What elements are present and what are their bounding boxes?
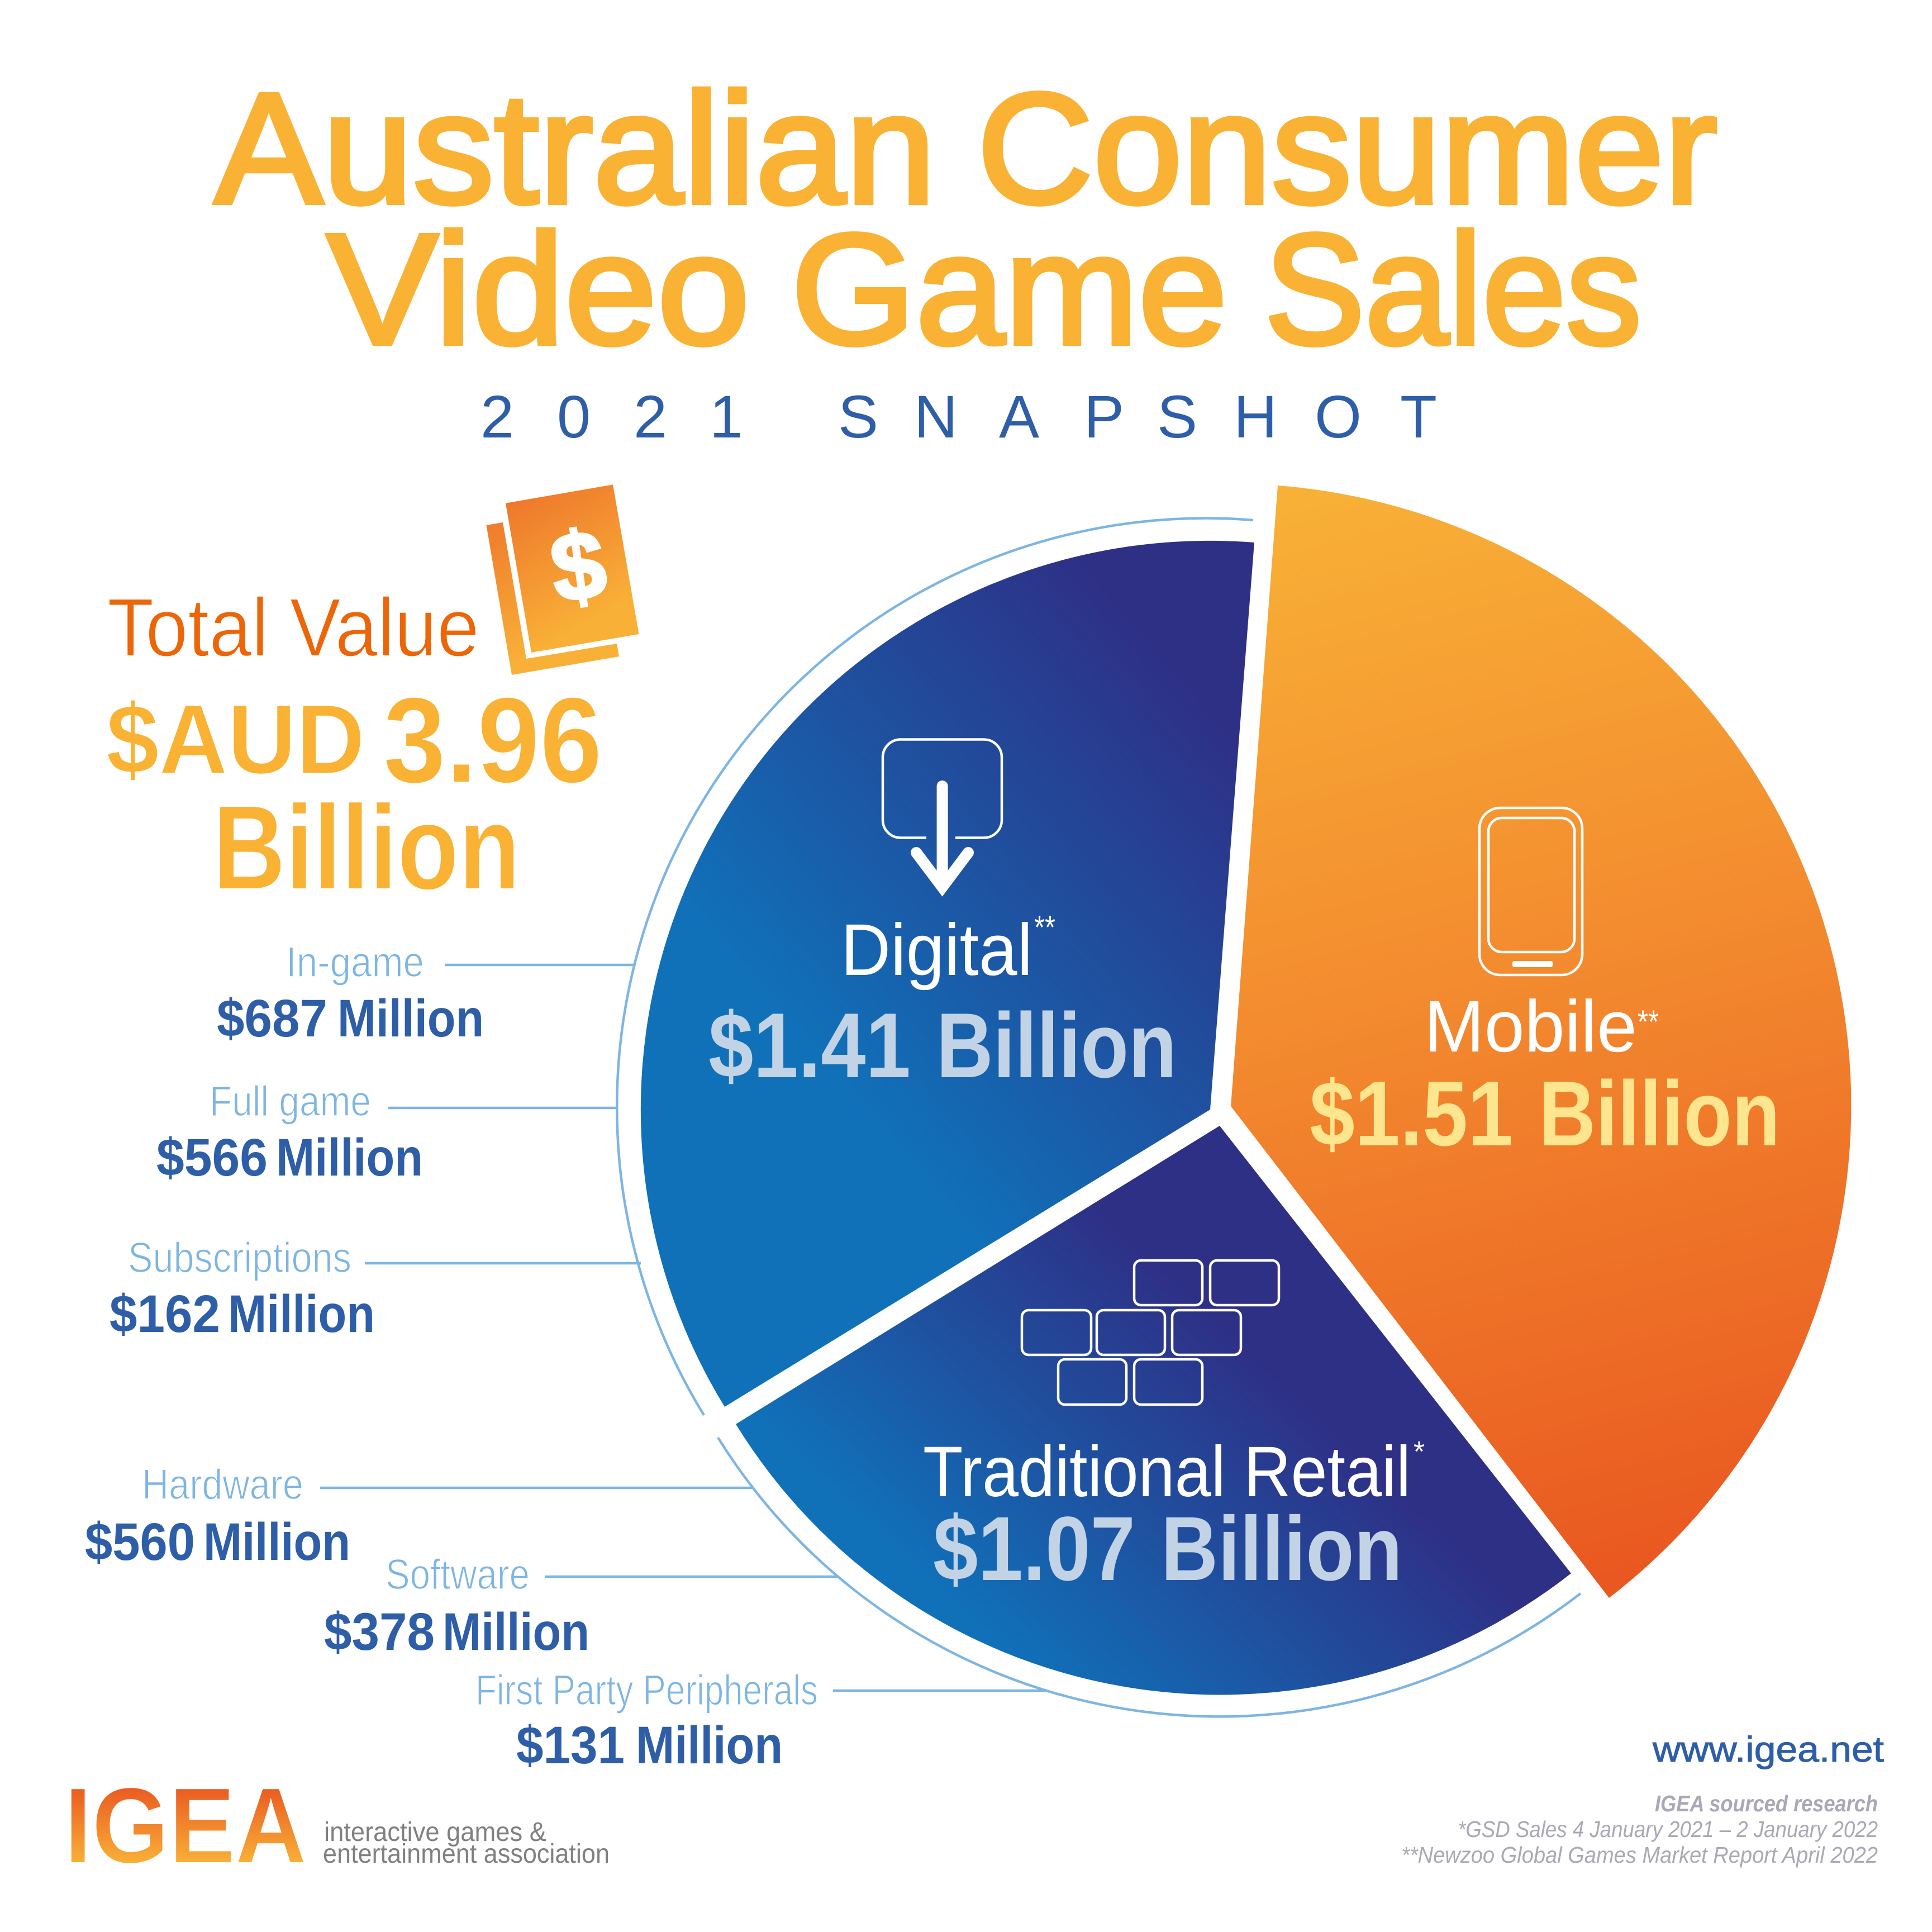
callout: subscriptions: Million xyxy=(228,1284,375,1344)
traditional retail value: $1.07 xyxy=(933,1497,1135,1600)
callout: hardware: Million xyxy=(203,1512,350,1572)
sources: IGEA sourced research xyxy=(1655,1791,1878,1816)
callout: first party peripherals: $131 xyxy=(516,1716,625,1775)
icon: banknotes: $ xyxy=(544,510,612,623)
digital value: $1.41 xyxy=(708,994,911,1097)
callout: first party peripherals: Million xyxy=(636,1716,783,1775)
callout: in-game: Million xyxy=(337,989,484,1048)
callout: subscriptions: Subscriptions xyxy=(128,1234,351,1282)
logo: IGEA xyxy=(64,1765,610,1886)
total value block xyxy=(106,484,639,915)
callout: software: Million xyxy=(442,1602,589,1662)
total value amount: $AUD xyxy=(106,684,365,794)
pie chart xyxy=(617,486,1851,1716)
slice: traditional retail xyxy=(736,1126,1571,1695)
callout: software: $378 xyxy=(324,1602,435,1662)
mobile label: ** xyxy=(1638,1004,1659,1040)
digital value xyxy=(708,994,1177,1097)
icon: banknotes xyxy=(486,484,639,675)
callout: software xyxy=(324,1551,839,1662)
callout: subscriptions xyxy=(110,1234,641,1344)
callout: hardware xyxy=(85,1461,754,1572)
total value amount xyxy=(106,673,602,915)
callout: in-game: $687 xyxy=(217,989,327,1048)
digital value: Billion xyxy=(936,994,1177,1097)
callout: first party peripherals xyxy=(475,1667,1046,1775)
icon: bricks xyxy=(1022,1260,1279,1405)
callout: in-game: In-game xyxy=(286,939,424,986)
callout: hardware: Hardware xyxy=(142,1461,303,1509)
total value amount: 3.96 xyxy=(383,673,602,808)
logo tagline: interactive games & xyxy=(324,1817,546,1847)
callout: software: Software xyxy=(386,1551,530,1598)
title: Game xyxy=(791,201,1227,377)
slice: mobile xyxy=(1231,486,1851,1598)
callout: subscriptions: $162 xyxy=(110,1284,220,1344)
sources: **Newzoo Global Games Market Report April 2022 xyxy=(1401,1842,1878,1868)
traditional retail label: Traditional Retail xyxy=(923,1432,1411,1512)
traditional retail value: Billion xyxy=(1161,1497,1402,1600)
mobile label: Mobile xyxy=(1424,985,1637,1067)
logo: IGEA: IGEA xyxy=(64,1765,307,1886)
website: www.igea.net xyxy=(1652,1729,1884,1769)
icon: download xyxy=(883,740,1002,887)
digital label: ** xyxy=(1034,910,1055,946)
callout: in-game xyxy=(217,939,634,1048)
sources xyxy=(1401,1791,1878,1868)
callout: full game xyxy=(156,1078,616,1187)
digital label: Digital xyxy=(841,908,1032,991)
sources: *GSD Sales 4 January 2021 – 2 January 2022 xyxy=(1458,1816,1878,1842)
pie ring arcs xyxy=(617,518,1581,1716)
mobile value xyxy=(1310,1062,1780,1165)
title xyxy=(215,60,1717,377)
callout: full game: Million xyxy=(276,1128,423,1187)
callout: first party peripherals: First Party Peripherals xyxy=(475,1667,818,1714)
logo tagline: entertainment association xyxy=(323,1839,610,1869)
callout: full game: $566 xyxy=(156,1128,268,1187)
traditional retail label: * xyxy=(1414,1436,1425,1468)
total value amount: Billion xyxy=(213,780,520,915)
title: Sales xyxy=(1264,201,1641,377)
total value label: Total Value xyxy=(107,582,479,674)
icon: smartphone xyxy=(1479,808,1582,975)
callout: hardware: $560 xyxy=(85,1512,195,1572)
mobile value: Billion xyxy=(1539,1062,1780,1165)
slice: digital xyxy=(641,541,1254,1407)
callout: full game: Full game xyxy=(210,1078,371,1125)
title: Consumer xyxy=(977,60,1717,236)
mobile value: $1.51 xyxy=(1310,1062,1513,1165)
title: Video xyxy=(327,201,750,377)
logo tagline xyxy=(323,1817,610,1869)
title: Australian xyxy=(215,60,936,236)
traditional retail value xyxy=(933,1497,1402,1600)
subtitle: 2021SNAPSHOT xyxy=(480,383,1437,450)
